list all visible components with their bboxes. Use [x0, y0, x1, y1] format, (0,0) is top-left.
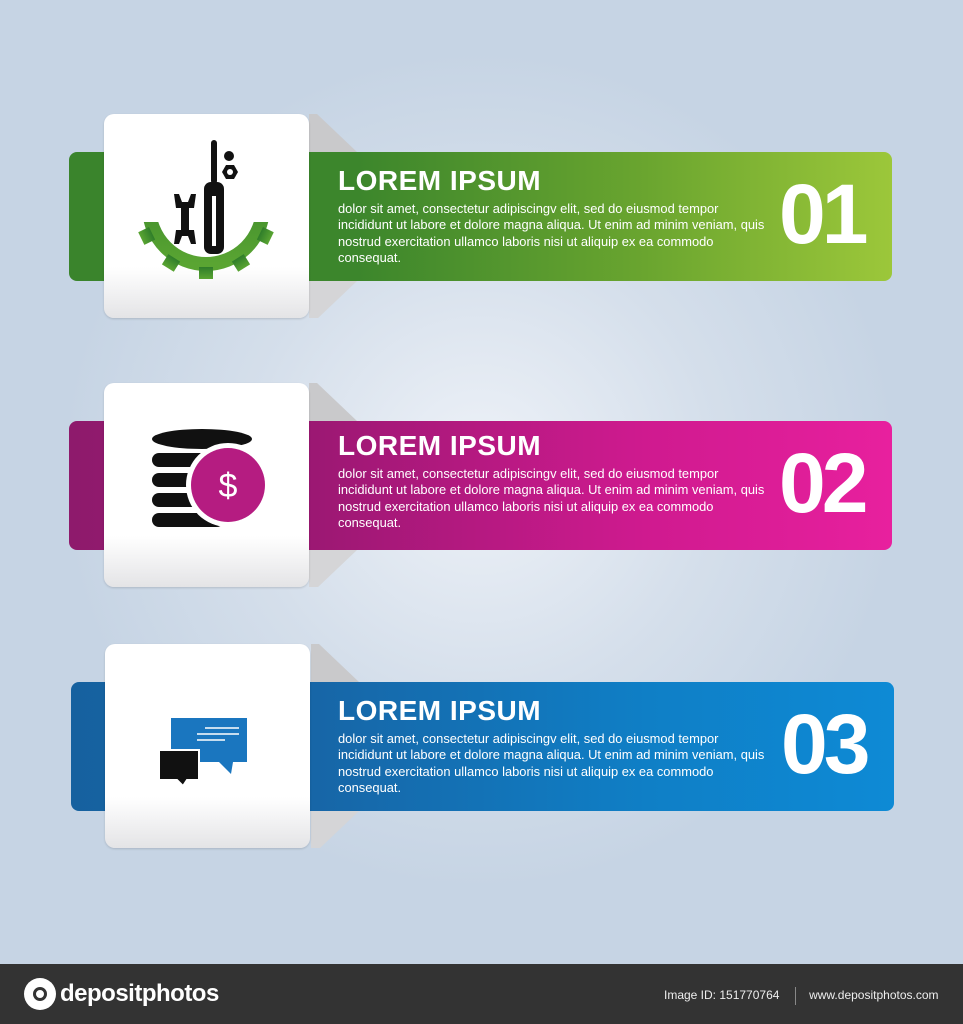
text 03: consequat. — [338, 780, 401, 795]
panel: step 03 — [71, 644, 894, 850]
text 03: incididunt ut labore et dolore magna aliqua. Ut enim ad minim veniam, quis — [338, 747, 764, 762]
text 03: LOREM IPSUM — [338, 695, 541, 726]
text 02: incididunt ut labore et dolore magna aliqua. Ut enim ad minim veniam, quis — [338, 482, 764, 497]
footer logo: depositphotos — [60, 980, 219, 1007]
card 03 — [105, 644, 310, 848]
card 02 — [104, 383, 309, 587]
text 03: nostrud exercitation ullamco laboris nisi ut aliquip ex ea commodo — [338, 764, 713, 779]
number 02: 02 — [779, 436, 864, 530]
text 01: LOREM IPSUM — [338, 165, 541, 196]
text 02: consequat. — [338, 515, 401, 530]
footer bar — [0, 964, 963, 1024]
text 01: nostrud exercitation ullamco laboris nisi ut aliquip ex ea commodo — [338, 234, 713, 249]
fold 01 — [309, 114, 357, 318]
fold 03 — [311, 644, 359, 848]
text 01: consequat. — [338, 250, 401, 265]
text 02: dolor sit amet, consectetur adipiscingv elit, sed do eiusmod tempor — [338, 466, 718, 481]
text 01: incididunt ut labore et dolore magna aliqua. Ut enim ad minim veniam, quis — [338, 217, 764, 232]
footer info: Image ID: 151770764 www.depositphotos.com — [664, 988, 938, 1002]
text 02: nostrud exercitation ullamco laboris nisi ut aliquip ex ea commodo — [338, 499, 713, 514]
text 03: dolor sit amet, consectetur adipiscingv elit, sed do eiusmod tempor — [338, 731, 718, 746]
card 01 — [104, 114, 309, 318]
text 02 — [338, 430, 764, 530]
icon: coins with dollar: $ — [219, 467, 238, 505]
panel: step 02 — [69, 383, 892, 589]
number 03: 03 — [781, 697, 866, 791]
fold 02 — [309, 383, 357, 587]
text 01 — [338, 165, 764, 265]
banner 02 — [69, 421, 892, 550]
text 01: dolor sit amet, consectetur adipiscingv elit, sed do eiusmod tempor — [338, 201, 718, 216]
banner 01 — [69, 152, 892, 281]
panel: step 01 — [69, 114, 892, 320]
icon: coins with dollar — [152, 429, 265, 527]
icon: chat bubbles — [160, 718, 247, 784]
text 03 — [338, 695, 764, 795]
icon: tools gear — [138, 140, 274, 279]
number 01: 01 — [779, 167, 864, 261]
text 02: LOREM IPSUM — [338, 430, 541, 461]
banner 03 — [71, 682, 894, 811]
footer logo — [24, 978, 219, 1010]
